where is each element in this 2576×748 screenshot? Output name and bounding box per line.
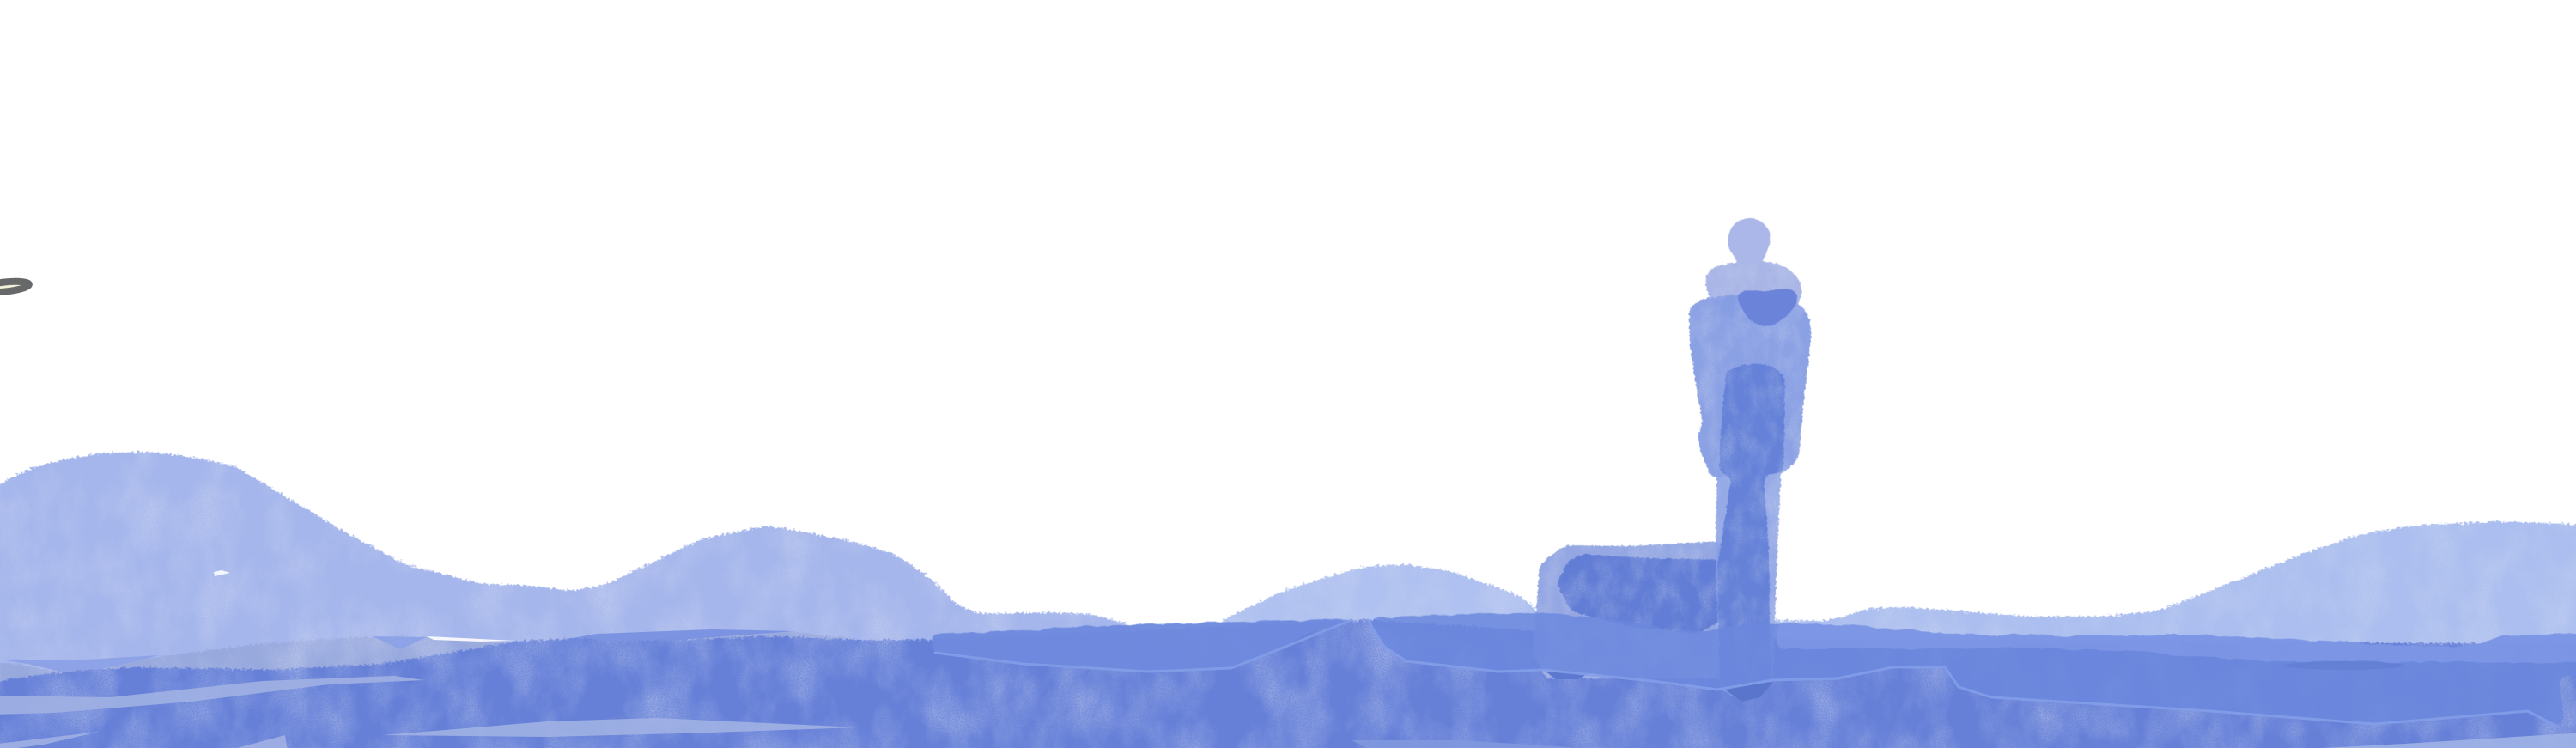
seat block outer wash <box>1533 541 1730 678</box>
dark chest shape <box>1736 289 1799 326</box>
hills: left range <box>0 452 1133 678</box>
small white fleck on left hill <box>214 570 230 576</box>
head <box>1727 218 1771 266</box>
hills: centre hill <box>1220 564 1541 653</box>
ground: grey ridge behind water <box>0 630 859 704</box>
shoulders <box>1704 261 1802 325</box>
ground: main dark wash <box>0 620 2576 748</box>
ground: translucent patches on the ridge <box>0 629 794 674</box>
ground: white sliver on the ridge <box>427 636 515 642</box>
water: pale outlines along band edges <box>935 620 2555 726</box>
ring object at left edge <box>0 280 29 294</box>
leg outer wash <box>1716 455 1782 702</box>
hills: right range <box>1769 521 2576 670</box>
figure: body <box>1689 218 1811 702</box>
water: left band <box>930 618 1368 672</box>
seat block inner shadow <box>1557 554 1739 634</box>
water: dark shadow streak <box>2284 661 2404 670</box>
ground: pale brush streaks <box>0 676 2576 748</box>
torso and leg inner shadow <box>1717 364 1785 687</box>
water: right band lower tone <box>1368 612 2576 726</box>
torso <box>1689 292 1811 478</box>
figure: seat block <box>1533 541 1739 679</box>
leg foot shadow <box>1722 682 1773 702</box>
seat block drip marks <box>1546 672 1589 679</box>
water: right band upper pale tone <box>1777 623 2576 663</box>
